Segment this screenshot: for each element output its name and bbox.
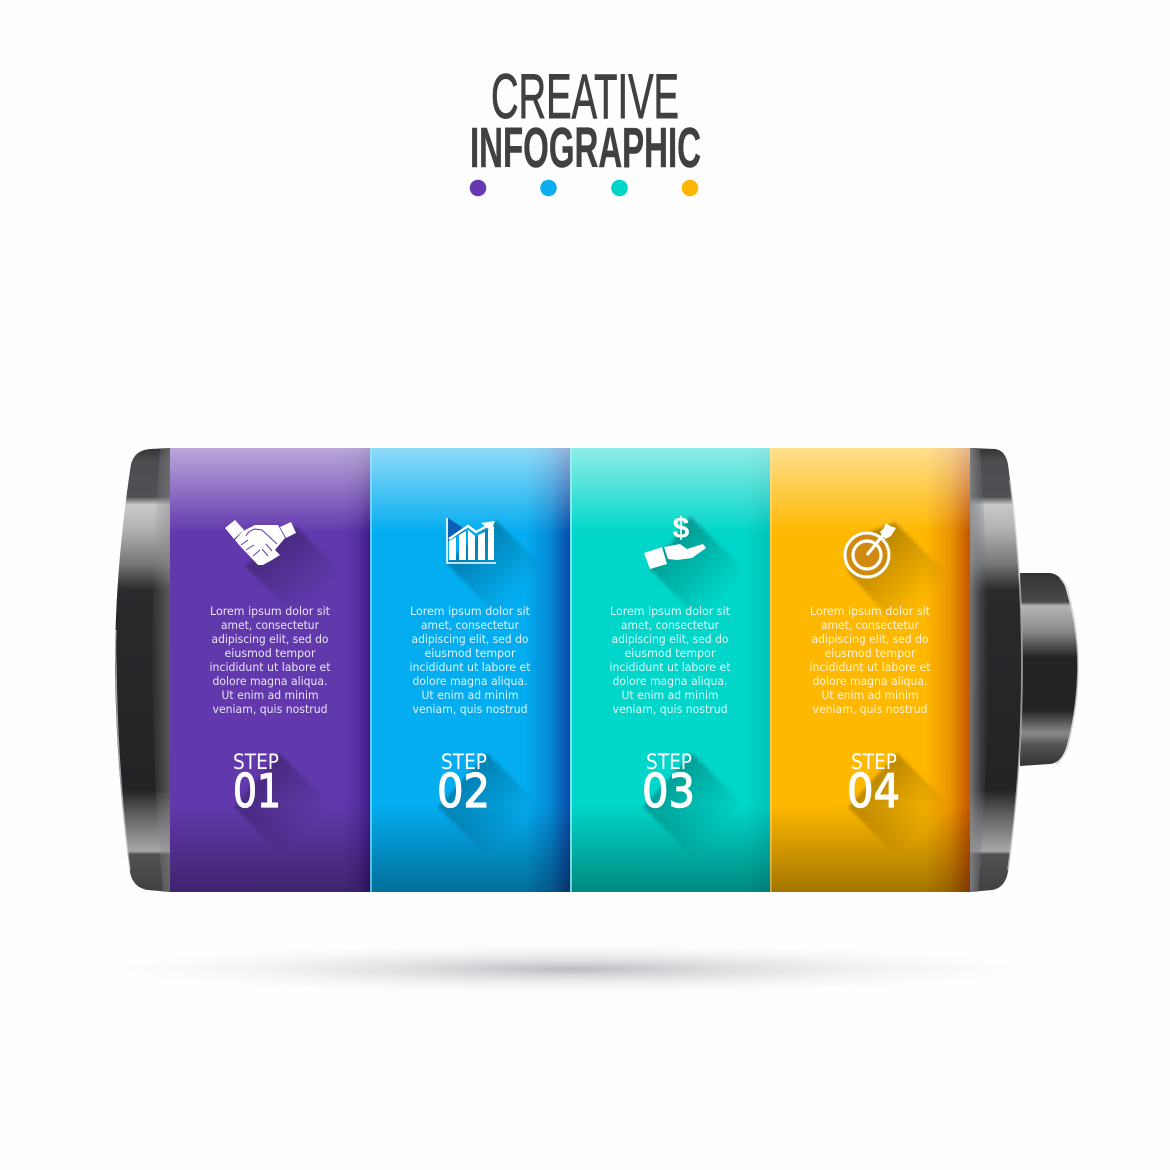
- step label: 03: [642, 764, 695, 818]
- body text: eiusmod tempor: [424, 646, 516, 660]
- body text: amet, consectetur: [421, 618, 519, 632]
- body text: Lorem ipsum dolor sit: [610, 604, 730, 618]
- panel fill teal: [570, 448, 770, 892]
- body text: amet, consectetur: [621, 618, 719, 632]
- panel: step 3: [570, 448, 770, 892]
- step label: STEP: [233, 750, 279, 775]
- body text: incididunt ut labore et: [610, 660, 731, 674]
- step label: [233, 750, 281, 818]
- long shadow: chart icon: [446, 520, 556, 624]
- long shadow: step 04: [848, 753, 959, 869]
- long shadow: target icon: [848, 522, 962, 636]
- panel fill purple: [170, 448, 370, 892]
- battery right cap: [970, 448, 1023, 892]
- panel: step 2: [370, 448, 570, 892]
- colour dots: [470, 180, 698, 196]
- long shadow: step 01: [234, 753, 341, 869]
- body text: adipiscing elit, sed do: [412, 632, 528, 646]
- body text: dolore magna aliqua.: [812, 674, 928, 688]
- long shadow: step 03: [643, 753, 754, 869]
- panel: step 4: [770, 448, 970, 892]
- body text: Ut enim ad minim: [422, 688, 518, 702]
- body text: [810, 604, 931, 716]
- step label: STEP: [441, 750, 487, 775]
- icon: handshake: [225, 520, 296, 565]
- long shadow: handshake icon: [245, 526, 356, 626]
- body text: adipiscing elit, sed do: [612, 632, 728, 646]
- icon: hand with dollar: $: [673, 512, 690, 545]
- body text: dolore magna aliqua.: [612, 674, 728, 688]
- icon: hand with dollar: [644, 512, 706, 569]
- icon: bar chart: [447, 518, 496, 563]
- title: [470, 62, 701, 180]
- body text: [410, 604, 531, 716]
- body text: adipiscing elit, sed do: [212, 632, 328, 646]
- long shadow: step 02: [438, 753, 549, 869]
- panel fill yellow: [770, 448, 970, 892]
- body text: eiusmod tempor: [824, 646, 916, 660]
- body text: incididunt ut labore et: [410, 660, 531, 674]
- title line: infographic: INFOGRAPHIC: [470, 116, 701, 180]
- ground shadow: [110, 944, 1030, 994]
- body text: Lorem ipsum dolor sit: [810, 604, 930, 618]
- body text: eiusmod tempor: [224, 646, 316, 660]
- step label: 02: [437, 764, 490, 818]
- body text: dolore magna aliqua.: [212, 674, 328, 688]
- body text: Ut enim ad minim: [222, 688, 318, 702]
- body text: dolore magna aliqua.: [412, 674, 528, 688]
- panel fill blue: [370, 448, 570, 892]
- battery terminal: [1020, 573, 1078, 766]
- body text: [210, 604, 331, 716]
- body text: Ut enim ad minim: [622, 688, 718, 702]
- body text: veniam, quis nostrud: [212, 702, 328, 716]
- body text: incididunt ut labore et: [210, 660, 331, 674]
- body text: veniam, quis nostrud: [612, 702, 728, 716]
- panel: step 1: [170, 448, 370, 892]
- body text: eiusmod tempor: [624, 646, 716, 660]
- title line: creative: CREATIVE: [491, 62, 679, 132]
- body text: amet, consectetur: [821, 618, 919, 632]
- long shadow: hand and dollar icon: [650, 516, 760, 630]
- body text: incididunt ut labore et: [810, 660, 931, 674]
- body text: Ut enim ad minim: [822, 688, 918, 702]
- body text: veniam, quis nostrud: [412, 702, 528, 716]
- icon: target with arrow: [845, 523, 896, 577]
- body text: amet, consectetur: [221, 618, 319, 632]
- body text: adipiscing elit, sed do: [812, 632, 928, 646]
- body text: Lorem ipsum dolor sit: [410, 604, 530, 618]
- step label: STEP: [851, 750, 897, 775]
- body text: [610, 604, 731, 716]
- step label: 04: [847, 764, 900, 818]
- step label: STEP: [646, 750, 692, 775]
- body text: Lorem ipsum dolor sit: [210, 604, 330, 618]
- body text: veniam, quis nostrud: [812, 702, 928, 716]
- step label: 01: [233, 764, 281, 818]
- battery left cap: [115, 448, 170, 892]
